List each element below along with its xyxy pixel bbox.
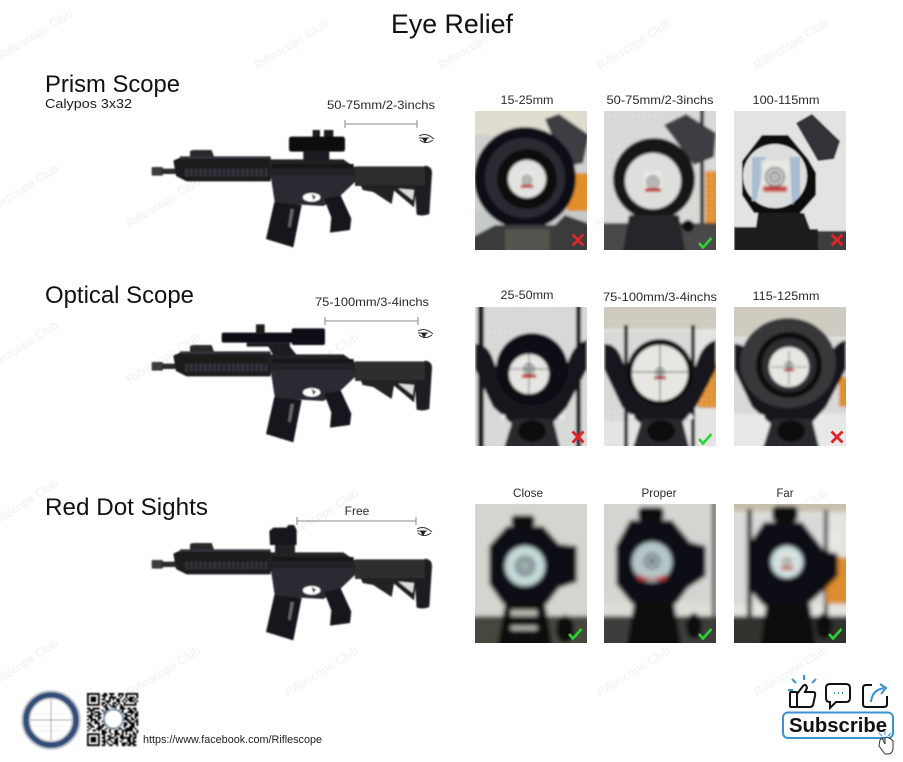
watermarks: Riflescope Club (751, 331, 830, 388)
watermarks: Riflescope Club (282, 643, 361, 700)
watermarks: Riflescope Club (124, 643, 203, 700)
status: wrong (572, 432, 584, 442)
photo label row 1 (500, 93, 820, 107)
photo: optical 115-125mm too far (734, 307, 846, 446)
heading: Optical Scope: Optical Scope (45, 282, 194, 309)
title: Eye Relief (391, 9, 513, 39)
button: subscribe: Subscribe (789, 715, 887, 737)
QR code (87, 694, 138, 745)
watermarks: Riflescope Club (751, 486, 830, 543)
photo: red dot close (475, 504, 587, 643)
watermarks: Riflescope Club (751, 643, 830, 700)
eye relief measure: 50-75mm: 50-75mm/2-3inchs (327, 98, 435, 112)
status: wrong (572, 234, 584, 246)
status: correct (569, 629, 582, 638)
photo: red dot proper (604, 504, 716, 643)
watermarks: Riflescope Club (282, 330, 361, 387)
subscribe block (783, 675, 893, 754)
photo label row 1: 100-115mm (752, 93, 820, 107)
eye relief measure: free (297, 504, 432, 536)
rifle with red dot sight (152, 525, 432, 640)
status: correct (829, 629, 842, 638)
photo label row 1: 15-25mm (500, 93, 554, 107)
icon: pointer hand (879, 730, 893, 754)
photo: red dot far (734, 504, 846, 643)
watermarks: Riflescope Club (124, 330, 203, 387)
photo label row 1: 50-75mm/2-3inchs (606, 93, 714, 107)
watermarks: Riflescope Club (252, 16, 331, 73)
photo label row 2: 115-125mm (752, 289, 820, 303)
watermarks: Riflescope Club (124, 174, 203, 231)
eye relief measure: 75-100mm: 75-100mm/3-4inchs (315, 295, 429, 309)
eye relief measure: 50-75mm (327, 98, 435, 143)
status: wrong (832, 432, 842, 442)
photo: prism 100-115mm too far (734, 111, 846, 250)
photo label row 2: 75-100mm/3-4inchs (603, 290, 717, 304)
icon: share (863, 684, 887, 707)
watermarks: Riflescope Club (282, 486, 361, 543)
rifle with optical scope (152, 324, 432, 442)
watermarks: Riflescope Club (436, 16, 515, 73)
photo label row 2: 25-50mm (500, 288, 554, 302)
eye relief measure: 75-100mm (315, 295, 433, 338)
heading: Prism Scope: Prism Scope (45, 71, 180, 98)
watermarks: Riflescope Club (594, 174, 673, 231)
rifle with prism scope (152, 130, 432, 247)
status: correct (699, 434, 712, 444)
watermarks: Riflescope Club (594, 643, 673, 700)
subheading: Calypos 3x32: Calypos 3x32 (45, 96, 132, 111)
status: wrong (832, 234, 842, 246)
icon: comments (826, 684, 850, 708)
heading: Red Dot Sights: Red Dot Sights (45, 494, 208, 521)
photo: optical 25-50mm too close (475, 307, 587, 446)
photo label row 3 (513, 486, 794, 500)
photo: prism 15-25mm too close (475, 111, 587, 250)
photo label row 3: Proper (642, 486, 676, 500)
watermarks: Riflescope Club (594, 16, 673, 73)
photo label row 3: Far (776, 486, 794, 500)
watermarks: Riflescope Club (751, 174, 830, 231)
icon: thumbs up (788, 675, 816, 707)
facebook url: https://www.facebook.com/Riflescope (143, 734, 322, 746)
watermarks: Riflescope Club (751, 16, 830, 73)
eye relief measure: free: Free (345, 504, 370, 518)
photo label row 2 (500, 288, 820, 304)
logo badge (22, 691, 80, 749)
photo: optical 75-100mm correct (604, 307, 716, 446)
status: correct (699, 629, 712, 638)
status: correct (699, 238, 712, 248)
photo label row 3: Close (513, 486, 543, 500)
photo: prism 50-75mm correct (604, 111, 716, 250)
